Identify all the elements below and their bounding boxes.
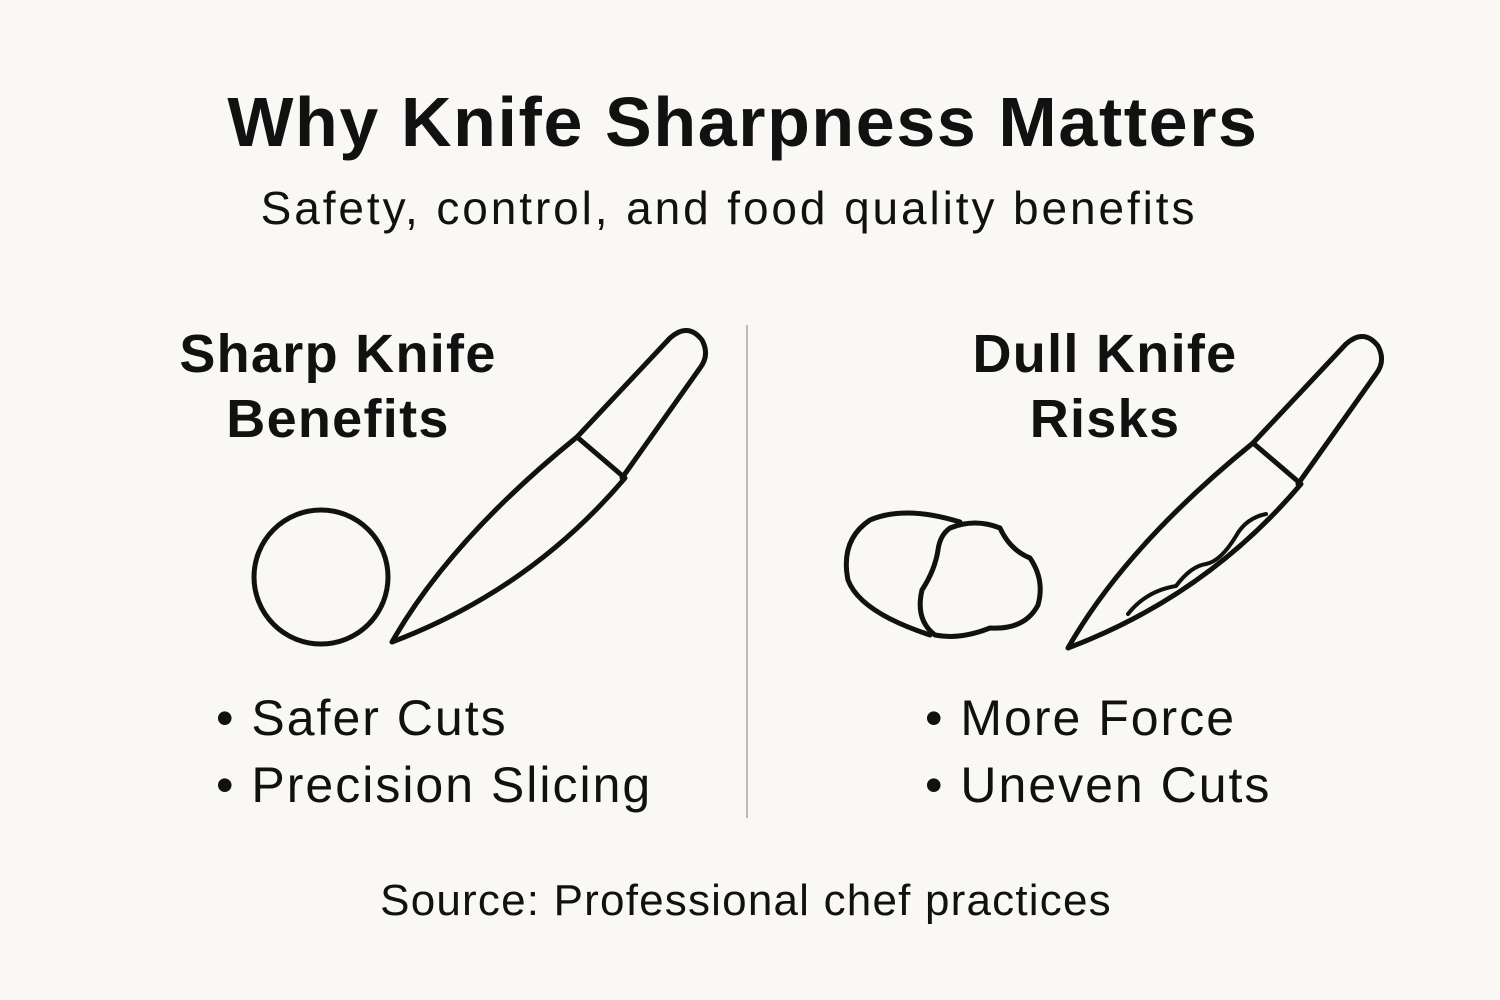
bullets: sharp: • Safer Cuts xyxy=(216,690,508,746)
title: Why Knife Sharpness Matters xyxy=(227,83,1259,161)
heading: sharp knife benefits: Sharp Knife xyxy=(179,324,497,384)
divider xyxy=(746,325,748,818)
icon: squashed food xyxy=(846,513,1040,636)
icon: whole round food xyxy=(254,510,388,644)
bullets: dull: • More Force xyxy=(925,690,1236,746)
heading: dull knife risks xyxy=(972,324,1238,449)
subtitle: Safety, control, and food quality benefits xyxy=(261,182,1197,234)
bullets: sharp: • Precision Slicing xyxy=(216,757,652,813)
heading: sharp knife benefits: Benefits xyxy=(226,389,450,449)
icon: sharp knife xyxy=(392,330,706,642)
bullets: dull: • Uneven Cuts xyxy=(925,757,1271,813)
heading: sharp knife benefits xyxy=(179,324,497,449)
heading: dull knife risks: Dull Knife xyxy=(972,324,1238,384)
heading: dull knife risks: Risks xyxy=(1030,389,1180,449)
source: Source: Professional chef practices xyxy=(380,876,1112,925)
bullets: sharp xyxy=(216,690,652,813)
icon: dull knife xyxy=(1068,336,1382,648)
bullets: dull xyxy=(925,690,1271,813)
